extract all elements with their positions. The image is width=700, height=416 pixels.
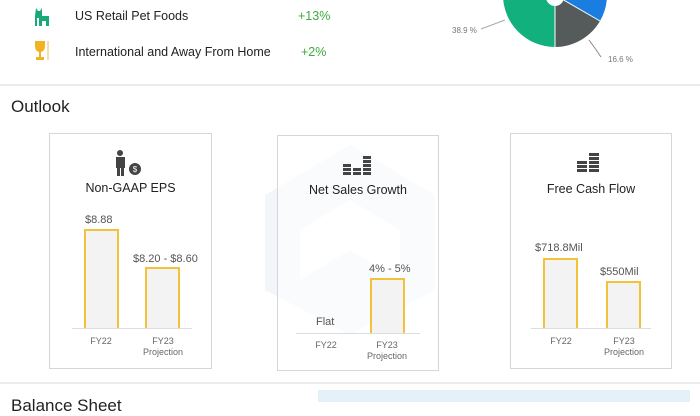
panel: Net Sales Growth: Projection [367, 351, 407, 361]
panel: Net Sales Growth: FY22 [315, 340, 337, 350]
panel: Free Cash Flow: FY22 [550, 336, 572, 346]
panel: Non-GAAP EPS [49, 133, 212, 369]
row: International [35, 41, 326, 60]
watermark [265, 188, 277, 296]
panel: Free Cash Flow [510, 133, 672, 369]
panel: Non-GAAP EPS: $8.88 [85, 214, 113, 226]
row: US Retail Pet Foods: US Retail Pet Foods [75, 9, 188, 23]
panel: Free Cash Flow: $550Mil [600, 266, 639, 278]
pie chart [452, 0, 633, 64]
row: International: International and Away From Home [75, 45, 271, 59]
panel: Free Cash Flow: Projection [604, 347, 644, 357]
row: US Retail Pet Foods [35, 8, 330, 26]
panel: Net Sales Growth: Flat [316, 316, 334, 328]
panel: Non-GAAP EPS: FY23 [152, 336, 174, 346]
icon: person with coin [116, 150, 141, 176]
panel: Net Sales Growth: FY23 [376, 340, 398, 350]
panel: Non-GAAP EPS: FY22 [90, 336, 112, 346]
icon: person with coin: $ [133, 165, 138, 174]
heading: Outlook: Outlook [11, 97, 70, 116]
heading: Balance Sheet (cut): Balance Sheet [11, 396, 122, 415]
row: International: +2% [301, 45, 326, 59]
light blue box [318, 390, 690, 402]
panel: Net Sales Growth [277, 135, 439, 371]
icon: coins [577, 153, 599, 172]
icon: trophy [35, 41, 49, 60]
row: US Retail Pet Foods: +13% [298, 9, 330, 23]
pie chart: 38.9 % [452, 26, 477, 35]
icon: cat [35, 8, 49, 26]
pie chart: 16.6 % [608, 55, 633, 64]
panel: Net Sales Growth: 4% - 5% [369, 263, 411, 275]
panel: Non-GAAP EPS: $8.20 - $8.60 [133, 253, 198, 265]
panel: Free Cash Flow: $718.8Mil [535, 242, 583, 254]
panel: Net Sales Growth: Net Sales Growth [309, 183, 407, 197]
icon: coin stacks [343, 156, 371, 175]
panel: Free Cash Flow: Free Cash Flow [547, 182, 635, 196]
panel: Non-GAAP EPS: Projection [143, 347, 183, 357]
panel: Free Cash Flow: FY23 [613, 336, 635, 346]
panel: Non-GAAP EPS: Non-GAAP EPS [85, 181, 176, 195]
